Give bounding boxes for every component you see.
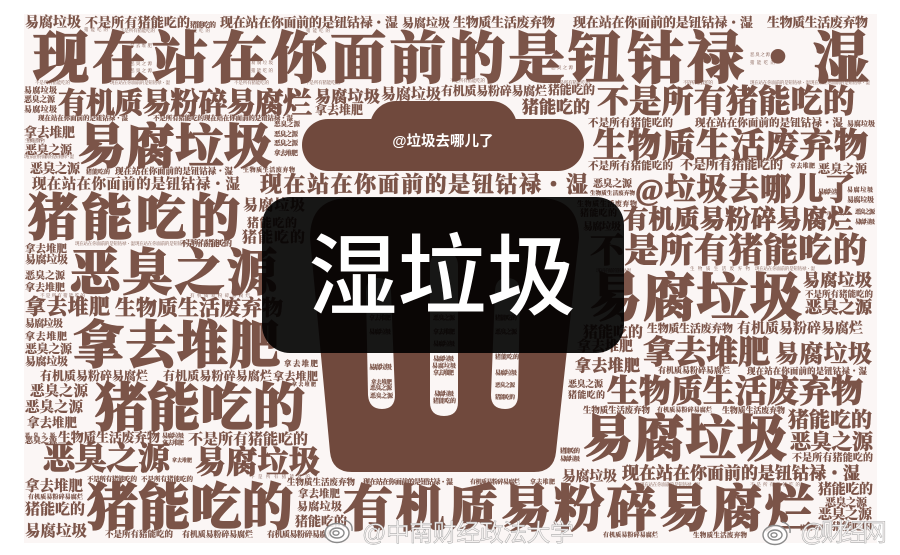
watermark: 财经网: @财经网: [800, 519, 887, 547]
phrase cluster row 4: 易腐垃圾: [847, 195, 874, 204]
tiny filler phrases between large words: 恶臭之源: [551, 64, 574, 71]
tiny filler phrases between large words: 现在站在你面前的是钮钴禄・湿: [110, 79, 170, 86]
tiny filler phrases between large words: 恶臭之源: [130, 60, 152, 67]
phrase cluster row 4: 现在站在你面前的是钮钴禄・湿: [32, 175, 240, 193]
tiny filler phrases between large words: 猪能吃的: [251, 67, 274, 74]
phrase cluster row 8: 恶臭之源: [568, 378, 604, 389]
phrase cluster row 3: 易腐垃圾: [847, 119, 875, 128]
bottom rows of phrases: 有机质易粉碎易腐烂: [267, 529, 335, 539]
bottom rows of phrases: 拿去堆肥: [530, 478, 555, 486]
phrase cluster row 4: 恶臭之源: [593, 177, 633, 190]
phrase cluster row 7: 猪能吃的: [583, 323, 643, 341]
bottom rows of phrases: 易腐垃圾: [297, 499, 342, 513]
phrase cluster row 5: 易腐垃圾: [855, 218, 875, 226]
bottom rows of phrases: 恶臭之源: [818, 506, 874, 523]
small words inside the slots: 拿去堆肥: [371, 378, 392, 386]
phrase cluster row 2: 有机质易粉碎易腐烂: [441, 83, 547, 98]
phrase cluster row 3: 不是所有猪能吃的现在站在你面前的是钮钴禄・湿: [153, 113, 294, 122]
tiny filler phrases between large words: 不是所有猪能吃的: [120, 27, 156, 34]
small words inside the slots: [369, 314, 519, 405]
phrase cluster row 7: 生物质生活废弃物: [647, 321, 733, 335]
phrase cluster row 5: 恶臭之源: [855, 208, 876, 216]
phrase cluster row 2: 易腐垃圾: [24, 85, 57, 95]
slot 2: [430, 252, 458, 416]
small words inside the slots: 易腐垃圾: [495, 369, 517, 377]
bottom rows of phrases: [25, 474, 874, 540]
small words inside the slots: 恶臭之源: [495, 381, 515, 389]
bottom rows of phrases: 有机质易粉碎易腐烂: [182, 529, 253, 539]
tiny filler phrases between large words: 现在站在你面前的是钮钴禄・湿: [24, 153, 74, 160]
phrase cluster row 9: 易腐垃圾: [560, 455, 580, 463]
phrase cluster row 5: 易腐垃圾: [243, 196, 305, 214]
phrase cluster row 7: 拿去堆肥: [284, 358, 318, 368]
phrase cluster row 3: 恶臭之源: [274, 119, 300, 128]
phrase cluster row 9: 不是所有猪能吃的: [792, 451, 873, 464]
phrase cluster row 2: 猪能吃的: [522, 97, 590, 117]
phrase cluster row 2: 拿去堆肥: [315, 102, 363, 117]
phrase cluster row 2: 有机质易粉碎易腐烂: [58, 86, 312, 120]
phrase cluster row 9: 拿去堆肥: [162, 439, 184, 447]
phrase cluster row 4: 现在站在你面前的是钮钴禄・湿: [115, 166, 233, 176]
icon: trash can lid with handle: [302, 101, 584, 171]
tiny filler phrases between large words: 现在站在你面前的是钮钴禄・湿: [755, 265, 816, 272]
bottom rows of phrases: 猪能吃的: [25, 500, 85, 518]
bottom rows of phrases: 拿去堆肥: [298, 487, 340, 500]
small words inside the slots: 易腐垃圾: [432, 362, 456, 370]
slot 3: [491, 278, 520, 409]
icon: weibo logo: [325, 520, 352, 542]
top row of small phrases: 生物质生活废弃物: [767, 15, 868, 30]
phrase cluster row 6: 不是所有猪能吃的: [805, 289, 873, 299]
phrase cluster row 8: 恶臭之源: [30, 382, 90, 400]
phrase cluster row 6: [25, 242, 874, 328]
small words inside the slots: 易腐垃圾: [434, 390, 454, 398]
small words inside the slots: 恶臭之源: [495, 328, 518, 336]
bottom rows of phrases: 有机质易粉碎易腐烂: [603, 531, 658, 539]
bottom rows of phrases: 猪能吃的: [818, 481, 873, 498]
phrase cluster row 3: 拿去堆肥: [274, 148, 298, 157]
phrase cluster row 5: 猪能吃的: [242, 228, 305, 246]
phrase cluster row 8: 有机质易粉碎易腐烂: [657, 406, 712, 414]
tiny filler phrases between large words: 易腐垃圾: [251, 59, 274, 66]
phrase cluster row 2: 恶臭之源: [24, 94, 56, 104]
icon: trash can body with slots: [310, 198, 579, 472]
phrase cluster row 6: 恶臭之源: [70, 245, 281, 301]
top row of small phrases: 易腐垃圾: [402, 15, 450, 30]
phrase cluster row 5: 猪能吃的: [28, 190, 240, 246]
phrase cluster row 7: 易腐垃圾: [25, 354, 68, 368]
bottom rows of phrases: 有机质易粉碎易腐烂: [343, 481, 815, 537]
phrase cluster row 4: 不是所有猪能吃的: [680, 157, 783, 172]
phrase cluster row 7: 有机质易粉碎易腐烂: [658, 365, 730, 375]
bottom rows of phrases: 不是所有猪能吃的: [87, 474, 138, 483]
phrase cluster row 5: 猪能吃的: [580, 207, 617, 218]
phrase cluster row 9: 恶臭之源: [25, 435, 58, 445]
phrase cluster row 8: 有机质易粉碎易腐烂: [40, 368, 148, 383]
bottom rows of phrases: 猪能吃的: [832, 520, 872, 533]
phrase cluster row 5: 猪能吃的: [247, 215, 297, 230]
tiny filler phrases between large words: 不是所有猪能吃的: [750, 481, 800, 488]
tiny filler phrases between large words: 现在站在你面前的是钮钴禄・湿: [750, 79, 810, 86]
phrase cluster row 9: 拿去堆肥: [172, 457, 192, 464]
tiny filler phrases between large words: 生物质生活废弃物: [25, 137, 46, 144]
phrase cluster row 4: 现在站在你面前的是钮钴禄・湿: [260, 172, 588, 197]
tiny filler phrases between large words: 有机质易粉碎易腐烂: [190, 292, 250, 299]
phrase cluster row 2: 猪能吃的: [548, 82, 595, 97]
phrase cluster row 3: 恶臭之源: [30, 161, 81, 176]
phrase cluster row 7: 拿去堆肥: [73, 318, 280, 375]
bottom rows of phrases: 有机质易粉碎易腐烂: [470, 478, 520, 486]
top row of small phrases: 猪能吃的: [190, 20, 216, 29]
phrase cluster row 7: 拿去堆肥: [643, 334, 770, 370]
phrase cluster row 5: [28, 190, 876, 270]
phrase cluster row 5: 易腐垃圾: [583, 220, 621, 233]
phrase cluster row 5: 不是所有猪能吃的: [180, 238, 232, 248]
headline phrase: 现在站在你面前的是钮钴禄・湿: 湿: [813, 29, 869, 91]
tiny filler phrases between large words: 不是所有猪能吃的: [450, 77, 486, 84]
bottom rows of phrases: 生物质生活废弃物: [693, 530, 748, 539]
phrase cluster row 5: 不是所有猪能吃的: [590, 232, 867, 270]
phrase cluster row 9: 易腐垃圾: [195, 445, 320, 480]
phrase cluster row 9: 恶臭之源: [43, 440, 173, 476]
small words inside the slots: 猪能吃的: [495, 314, 517, 322]
small words inside the slots: 易腐垃圾: [433, 340, 455, 348]
tiny filler phrases between large words: 不是所有猪能吃的: [35, 79, 70, 86]
bottom rows of phrases: 不是所有猪能吃的: [105, 529, 173, 539]
phrase cluster row 7: 拿去堆肥: [577, 338, 633, 355]
phrase cluster row 4: 猪能吃的: [86, 168, 110, 176]
phrase cluster row 8: 拿去堆肥: [273, 369, 318, 383]
small words inside the slots: 拿去堆肥: [433, 328, 455, 336]
bottom rows of phrases: 不是所有猪能吃的: [141, 474, 194, 483]
tiny filler phrases between large words: 现在站在你面前的是钮钴禄・湿: [75, 240, 136, 247]
small words inside the slots: 拿去堆肥: [433, 369, 454, 377]
phrase cluster row 9: 易腐垃圾: [583, 411, 787, 467]
small words inside the slots: 猪能吃的: [495, 393, 515, 401]
bottom rows of phrases: 现在站在你面前的是钮钴禄・湿: [363, 477, 453, 486]
phrase cluster row 3: [24, 113, 875, 176]
tiny filler phrases between large words: 不是所有猪能吃的: [683, 79, 714, 86]
headline phrase: 现在站在你面前的是钮钴禄・湿: 现在站在你面前的是钮钴禄: [33, 29, 744, 91]
tiny filler phrases between large words: 恶臭之源: [130, 67, 152, 74]
phrase cluster row 7: 恶臭之源: [25, 341, 73, 356]
phrase cluster row 3: 恶臭之源: [25, 142, 73, 157]
phrase cluster row 9: 生物质生活废弃物: [58, 430, 160, 445]
phrase cluster row 3: 现在站在你面前的是钮钴禄・湿: [38, 113, 128, 122]
phrase cluster row 8: 生物质生活废弃物: [583, 405, 650, 415]
top row of small phrases: 现在站在你面前的是钮钴禄・湿: [220, 15, 398, 30]
phrase cluster row 9: 易腐垃圾: [162, 432, 184, 440]
watermark: 中南财经政法大学: @中南财经政法大学: [362, 520, 574, 547]
phrase cluster row 6: 易腐垃圾: [590, 269, 802, 328]
top row of small phrases: 易腐垃圾: [25, 14, 81, 31]
phrase cluster row 4: @垃圾去哪儿了: [635, 172, 855, 207]
small words inside the slots: 易腐垃圾: [369, 328, 391, 336]
tiny filler phrases between large words: 现在站在你面前的是钮钴禄・湿: [135, 240, 196, 247]
phrase cluster row 2: 易腐垃圾: [24, 104, 57, 114]
phrase cluster row 2: 易腐垃圾: [381, 85, 441, 103]
slot 1: [366, 278, 395, 409]
phrase cluster row 6: 易腐垃圾: [803, 270, 872, 290]
phrase cluster row 3: 不是所有猪能吃的: [588, 116, 674, 129]
small words inside the slots: 易腐垃圾: [433, 355, 454, 363]
tiny filler phrases between large words: 不是所有猪能吃的: [250, 473, 310, 480]
phrase cluster row 4: [32, 157, 874, 207]
phrase cluster row 6: 拿去堆肥: [25, 295, 110, 319]
phrase cluster row 8: [25, 368, 872, 438]
phrase cluster row 6: 拿去堆肥: [25, 281, 65, 294]
tiny filler phrases between large words: 不是所有猪能吃的: [40, 292, 86, 299]
tiny filler phrases between large words: 不是所有猪能吃的: [305, 79, 340, 86]
phrase cluster row 7: 有机质易粉碎易腐烂: [737, 320, 863, 337]
phrase cluster row 8: 猪能吃的: [788, 408, 872, 432]
phrase cluster row 9: 猪能吃的: [560, 447, 580, 455]
bottom rows of phrases: 恶臭之源: [825, 495, 868, 509]
phrase cluster row 9: 易腐垃圾: [562, 468, 617, 485]
tiny filler phrases between large words: 现在站在你面前的是钮钴禄・湿: [596, 267, 632, 274]
phrase cluster row 2: 易腐垃圾: [315, 87, 380, 106]
phrase cluster row 9: [25, 411, 875, 485]
phrase cluster row 2: [24, 82, 855, 120]
phrase cluster row 9: 恶臭之源: [790, 430, 875, 454]
black title box: [262, 197, 624, 353]
bottom rows of phrases: 有机质易粉碎易腐烂: [28, 493, 83, 501]
phrase cluster row 9: 不是所有猪能吃的: [188, 430, 308, 448]
title: 湿垃圾: 湿垃圾: [308, 227, 576, 327]
phrase cluster row 6: 恶臭之源: [805, 297, 874, 317]
phrase cluster row 8: 生物质生活废弃物: [722, 405, 785, 415]
phrase cluster row 8: 恶臭之源: [25, 398, 84, 416]
phrase cluster row 8: 猪能吃的: [95, 380, 305, 438]
top row of small phrases: 生物质生活废弃物: [453, 15, 555, 30]
phrase cluster row 3: 易腐垃圾: [78, 120, 272, 174]
tiny filler phrases between large words: 拿去堆肥: [130, 42, 152, 49]
small words inside the slots: 易腐垃圾: [369, 362, 392, 371]
icon: weibo logo: [763, 522, 790, 544]
phrase cluster row 6: 易腐垃圾: [25, 252, 68, 266]
phrase cluster row 3: 恶臭之源: [274, 138, 298, 147]
tiny filler phrases between large words: 现在站在你面前的是钮钴禄・湿: [810, 79, 870, 86]
phrase cluster row 3: 恶臭之源: [274, 129, 298, 138]
phrase cluster row 6: 拿去堆肥: [25, 242, 68, 255]
phrase cluster row 3: 现在站在你面前的是钮钴禄・湿: [695, 116, 844, 129]
headline phrase: 现在站在你面前的是钮钴禄・湿: ・: [750, 29, 806, 91]
small words inside the slots: 猪能吃的: [495, 353, 519, 361]
tiny filler phrases between large words: 生物质生活废弃物: [690, 265, 750, 272]
top row of small phrases: 现在站在你面前的是钮钴禄・湿: [573, 15, 753, 30]
phrase cluster row 8: 猪能吃的: [568, 389, 605, 400]
tiny filler phrases between large words: 易腐垃圾: [820, 210, 844, 217]
phrase cluster row 7: [25, 317, 872, 376]
phrase cluster row 4: 拿去堆肥: [790, 162, 815, 170]
phrase cluster row 8: 生物质生活废弃物: [607, 373, 863, 409]
tiny filler phrases between large words: 现在站在你面前的是钮钴禄・湿: [640, 481, 700, 488]
phrase cluster row 9: 现在站在你面前的是钮钴禄・湿: [622, 463, 860, 483]
phrase cluster row 4: 恶臭之源: [818, 161, 868, 176]
small words inside the slots: 恶臭之源: [433, 314, 456, 322]
phrase cluster row 7: 拿去堆肥: [25, 330, 67, 343]
bottom rows of phrases: 猪能吃的: [87, 480, 293, 537]
phrase cluster row 7: 拿去堆肥: [575, 356, 640, 375]
phrase cluster row 4: 易腐垃圾: [847, 186, 873, 194]
phrase cluster row 8: 拿去堆肥: [27, 415, 77, 430]
small words inside the slots: 恶臭之源: [370, 392, 394, 400]
phrase cluster row 7: 易腐垃圾: [25, 317, 63, 330]
tiny filler phrases between large words: 猪能吃的: [186, 27, 210, 34]
phrase cluster row 9: 恶臭之源: [25, 432, 56, 439]
phrase cluster row 4: 不是所有猪能吃的: [588, 159, 674, 172]
phrase cluster row 4: 生物质生活废弃物: [243, 166, 295, 174]
phrase cluster row 2: 不是所有猪能吃的: [597, 83, 855, 119]
small words inside the slots: 恶臭之源: [370, 384, 393, 392]
tiny filler phrases between large words: 猪能吃的: [750, 59, 776, 66]
tiny filler phrases between large words: 恶臭之源: [750, 51, 770, 58]
small words inside the slots: 拿去堆肥: [369, 314, 391, 322]
phrase cluster row 7: 易腐垃圾: [775, 340, 872, 368]
phrase cluster row 4: 易腐垃圾: [818, 188, 840, 196]
bottom rows of phrases: 易腐垃圾: [25, 521, 87, 540]
bottom rows of phrases: 拿去堆肥: [25, 477, 84, 495]
top row of small phrases: 不是所有猪能吃的: [85, 15, 190, 30]
bottom rows of phrases: 猪能吃的: [800, 524, 825, 532]
bottom rows of phrases: 猪能吃的: [295, 514, 347, 529]
phrase cluster row 8: 有机质易粉碎易腐烂: [163, 368, 272, 383]
small words inside the slots: 猪能吃的: [433, 397, 456, 405]
tiny filler phrases between large words: 猪能吃的: [84, 26, 108, 33]
top row of small phrases: [25, 14, 868, 31]
phrase cluster row 5: 有机质易粉碎易腐烂: [623, 205, 853, 234]
phrase cluster row 4: 生物质生活废弃物: [590, 189, 635, 197]
phrase cluster row 6: 生物质生活废弃物: [115, 296, 283, 320]
tiny filler phrases between large words: 不是所有猪能吃的: [234, 79, 270, 86]
lid label: @垃圾去哪儿了: [392, 132, 494, 150]
phrase cluster row 6: 恶臭之源: [25, 269, 66, 282]
phrase cluster row 5: 生物质生活废弃物: [577, 199, 637, 208]
phrase cluster row 3: 生物质生活废弃物: [593, 127, 868, 165]
tiny filler phrases between large words: [24, 26, 870, 488]
tiny filler phrases between large words: 猪能吃的: [306, 27, 330, 34]
phrase cluster row 8: 拿去堆肥: [292, 381, 316, 388]
tiny filler phrases between large words: 不是所有猪能吃的: [555, 79, 590, 86]
phrase cluster row 3: 拿去堆肥: [24, 125, 75, 141]
phrase cluster row 7: 现在站在你面前的是钮钴禄・湿: [747, 366, 867, 376]
bottom rows of phrases: 生物质生活废弃物: [287, 477, 355, 487]
